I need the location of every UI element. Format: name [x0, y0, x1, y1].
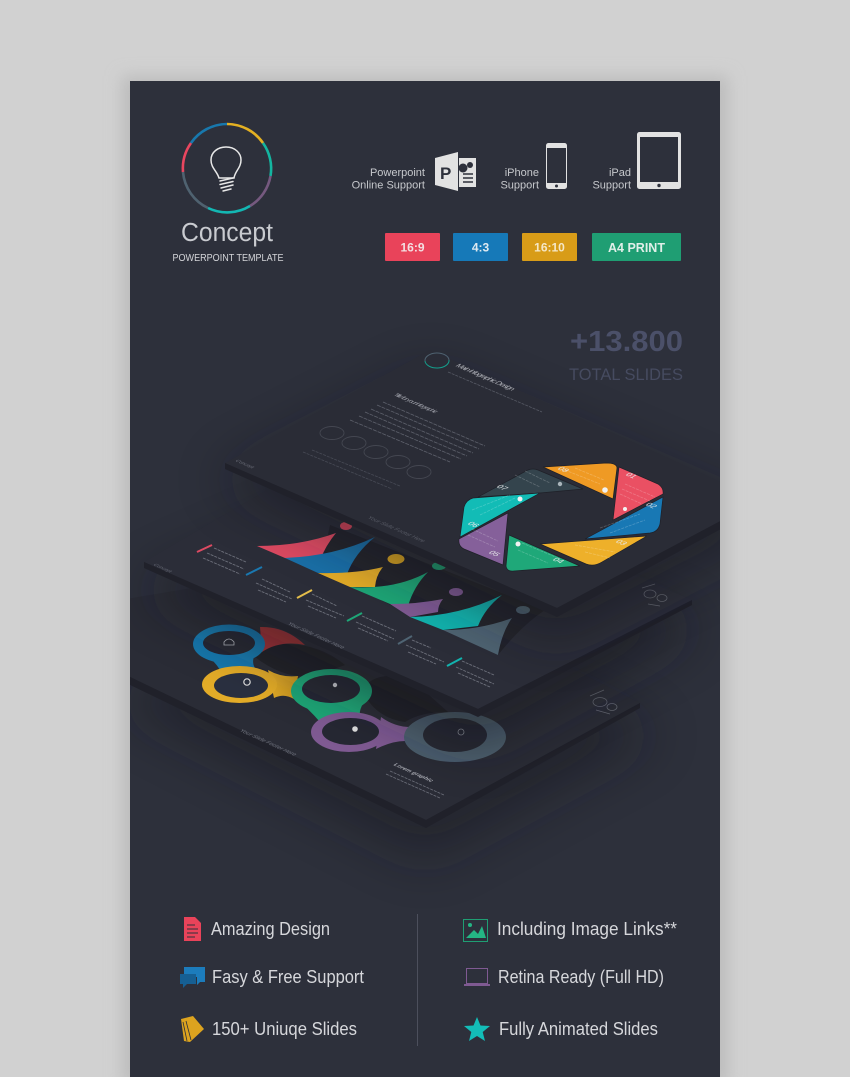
features list — [180, 917, 677, 1042]
text: iPhone support: iPhone — [505, 167, 539, 179]
slide 2: curved area chart — [144, 522, 692, 762]
icon: lightbulb — [211, 147, 241, 191]
slide 3 corner logo — [590, 690, 617, 714]
badge: 16:9 — [385, 233, 440, 261]
stat: total slides label: TOTAL SLIDES — [569, 365, 683, 384]
slide 1 lower text — [303, 450, 400, 489]
icon: yellow tags — [181, 1016, 204, 1042]
slide 1 content heading: Title for your infographic — [391, 393, 440, 415]
badge: 4:3 — [453, 233, 508, 261]
slide 3: metaball process — [130, 624, 640, 842]
feature: Retina Ready: Retina Ready (Full HD) — [498, 967, 664, 987]
support row: iPad — [592, 132, 681, 192]
slide 3 side note: Lorem graphic — [391, 763, 435, 783]
text: iPhone support: Support — [500, 180, 539, 192]
panel: dark background — [130, 81, 720, 1077]
hexagon numbers: 06 — [465, 521, 482, 529]
slide 1 logo — [425, 353, 449, 368]
hexagon numbers: 05 — [486, 550, 503, 558]
feature: 150+ Uniuqe Slides — [181, 1016, 357, 1042]
hexagon numbers: 04 — [550, 557, 567, 565]
hexagon numbers: 02 — [643, 502, 660, 510]
slide 1 footer caption: Your Slide Footer Here — [365, 516, 427, 544]
badge: A4 print — [592, 233, 681, 261]
slide 2 corner logo — [642, 584, 667, 606]
logo ring — [183, 124, 271, 212]
slide 1 brand mark: Concept — [233, 459, 256, 470]
hexagon numbers: 03 — [613, 539, 630, 547]
badge: A4 print: A4 PRINT — [608, 241, 665, 255]
hexagon text lines and small icons — [468, 468, 655, 563]
divider — [417, 914, 418, 1046]
metaball connectors — [205, 627, 414, 749]
node: yellow — [202, 666, 277, 703]
icon: green image — [464, 920, 488, 942]
hexagon numbers — [465, 466, 660, 565]
node: green — [291, 669, 372, 708]
slide 3 side note — [386, 763, 444, 798]
badge: 16:10: 16:10 — [534, 240, 565, 254]
slide 1 subtitle line — [448, 372, 542, 412]
hexagon segments — [459, 463, 663, 571]
icon: purple laptop — [464, 968, 490, 985]
subtitle: PowerPoint template: POWERPOINT TEMPLATE — [172, 253, 284, 264]
icon: iPhone — [546, 143, 567, 189]
feature: Amazing Design: Amazing Design — [211, 919, 330, 939]
text: iPad support: iPad — [609, 167, 631, 179]
title: Concept: Concept — [181, 219, 273, 247]
feature: 150+ Uniuqe Slides: 150+ Uniuqe Slides — [212, 1019, 357, 1039]
feature: Fully Animated Slides: Fully Animated Slides — [499, 1019, 658, 1039]
badge: 16:10 — [522, 233, 577, 261]
feature: Including Image Links: Including Image Links** — [497, 919, 677, 939]
text: PowerPoint online support: Powerpoint — [370, 167, 425, 179]
slide 1 paragraph — [350, 402, 485, 462]
slide 3 footer caption: Your Slide Footer Here — [237, 729, 298, 757]
icon: iPad — [637, 132, 681, 189]
logo: lightbulb in multicolour ring — [183, 124, 271, 212]
badge: 4:3: 4:3 — [472, 240, 489, 254]
support row: iPhone — [500, 143, 567, 192]
slide 1: hexagon infographic — [225, 352, 720, 644]
isometric slides stack — [130, 352, 720, 842]
feature: Fasy & Free Support: Fasy & Free Support — [212, 967, 364, 987]
chart curves — [257, 533, 512, 655]
slide 1 icon circles — [320, 426, 431, 478]
badge: 16:9: 16:9 — [400, 240, 425, 254]
node: slate — [404, 712, 506, 762]
node: purple — [311, 712, 387, 752]
icon: blue chat bubbles — [180, 967, 205, 988]
support row: PowerPoint — [352, 152, 476, 192]
icon: red document — [184, 917, 201, 941]
dark blobs — [255, 644, 448, 722]
chart dots — [340, 522, 530, 614]
slide 1 title: Main infographic Design — [453, 363, 518, 392]
feature: Fully Animated Slides — [464, 1017, 658, 1041]
text: iPad support: Support — [592, 180, 631, 192]
chart dark backdrop — [320, 525, 545, 655]
stat: total slides number: +13.800 — [570, 326, 683, 358]
hexagon numbers: 07 — [494, 484, 511, 492]
slide 2 footer caption: Your Slide Footer Here — [285, 622, 346, 650]
chart legend — [197, 545, 494, 687]
icon: teal star — [464, 1017, 490, 1041]
hexagon numbers: 08 — [555, 466, 572, 474]
node: blue — [193, 624, 265, 664]
feature: Amazing Design — [184, 917, 330, 941]
icon: PowerPoint: P — [440, 164, 451, 183]
slide 2 brand mark: Concept — [151, 563, 174, 574]
hexagon numbers: 01 — [623, 472, 640, 480]
text: PowerPoint online support: Online Support — [352, 180, 425, 192]
